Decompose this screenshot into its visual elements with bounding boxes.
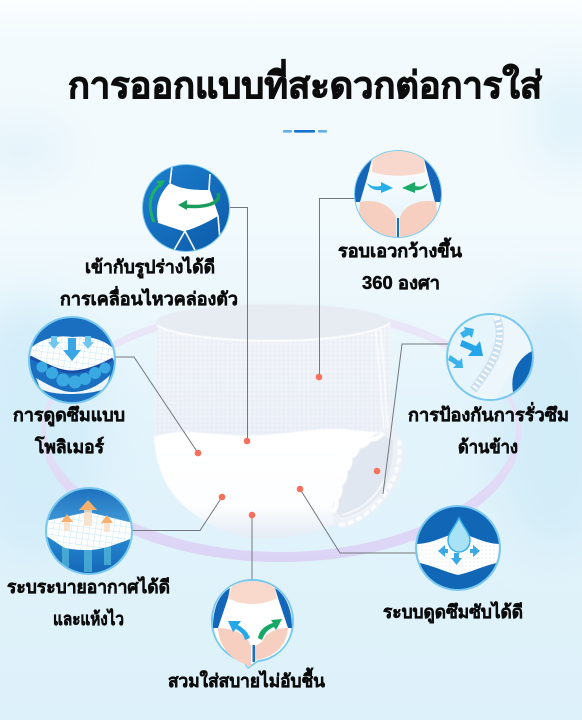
waistband opening [156, 304, 390, 340]
scalloped edge [333, 433, 383, 512]
inner panel [335, 435, 393, 518]
outer frill [332, 428, 403, 528]
label: polymer absorption: การดูดซึมแบบ [13, 405, 125, 427]
label: side leak guard [408, 402, 569, 457]
label: side leak guard: ด้านข้าง [458, 437, 518, 457]
decorative lavender orbit ring [41, 305, 521, 562]
icon: polymer absorption [28, 316, 116, 404]
label: absorption system: ระบบดูดซึมซับได้ดี [383, 601, 523, 624]
leader line: polymer [114, 357, 198, 453]
icon: absorption [415, 505, 501, 591]
leader line: body fit [229, 208, 248, 441]
icon: side leak guard [446, 313, 534, 402]
title: การออกแบบที่สะดวกต่อการใส่ [68, 59, 542, 106]
label: wider waist: รอบเอวกว้างขึ้น [338, 237, 463, 261]
label: breathable [7, 576, 170, 629]
icon: wider waist [354, 150, 442, 238]
label: breathable: และแห้งไว [53, 608, 124, 629]
label: wider waist: 360 องศา [362, 273, 440, 293]
label: side leak guard: การป้องกันการรั่วซึม [408, 402, 569, 425]
icon: comfortable wear [211, 579, 294, 669]
leader line: waist [320, 198, 355, 377]
label: polymer absorption: โพลิเมอร์ [34, 436, 104, 457]
leg cuff [332, 428, 403, 528]
leader line: comfort [251, 515, 253, 580]
icon: breathable [45, 487, 133, 575]
label: body fit: เข้ากับรูปร่างได้ดี [85, 256, 215, 279]
title divider [283, 130, 327, 133]
hotspot dots [195, 374, 380, 518]
leader line: breathable [131, 497, 222, 530]
label: breathable: ระบระบายอากาศได้ดี [7, 576, 170, 597]
label: body fit [60, 256, 238, 309]
label: polymer absorption [13, 405, 125, 457]
product: diaper pants [154, 304, 403, 538]
label: body fit: การเคลื่อนไหวคล่องตัว [60, 286, 238, 309]
absorbent belly [154, 428, 392, 538]
label: comfortable wear: สวมใส่สบายไม่อับชื้น [168, 667, 326, 691]
leader line: absorption [300, 489, 417, 553]
leader line: side leak guard [383, 344, 449, 494]
mesh upper wall [155, 322, 393, 436]
label: wider waist [338, 237, 463, 293]
icon: body fit [142, 164, 230, 254]
